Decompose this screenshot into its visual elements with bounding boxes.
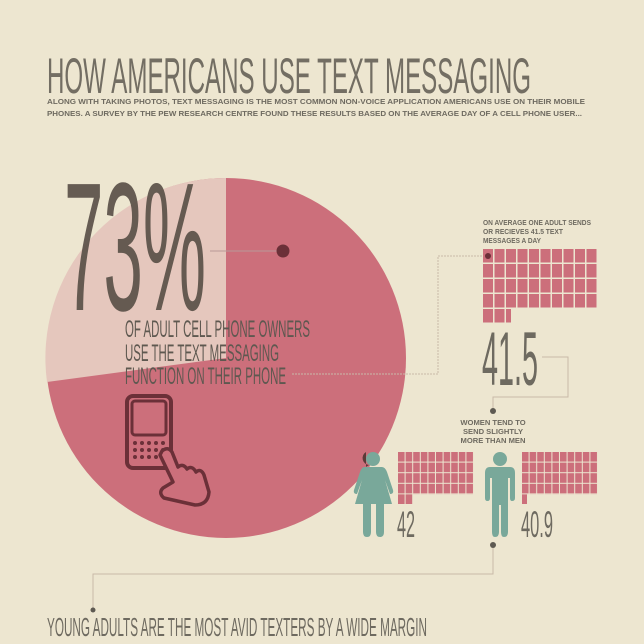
grid: men 40.9: [522, 452, 598, 504]
text: 41.5: [482, 317, 538, 402]
subtitle: PHONES. A SURVEY BY THE PEW RESEARCH CENTRE FOUND THESE RESULTS BASED ON THE AVERAGE DAY OF A CELL PHONE USER...: [47, 109, 582, 118]
subtitle: [47, 97, 585, 118]
pie chart: 73%: [45, 178, 406, 538]
dot markers: [90, 244, 496, 612]
text: average per day: MESSAGES A DAY: [483, 236, 541, 245]
icon: phone with hand: [127, 396, 209, 505]
text: 42: [397, 504, 415, 545]
text: 73%: [64, 144, 206, 349]
pie description: USE THE TEXT MESSAGING: [125, 340, 279, 367]
text: OF ADULT CELL PHONE OWNERS: [125, 316, 310, 343]
text: 40.9: [521, 504, 553, 545]
text: average per day: ON AVERAGE ONE ADULT SENDS: [483, 218, 591, 227]
pie description: FUNCTION ON THEIR PHONE: [125, 363, 286, 390]
grid: women 42: [398, 452, 474, 504]
connector lines: [93, 251, 568, 610]
icon: woman: [354, 452, 393, 537]
text: women send more: SEND SLIGHTLY: [463, 427, 523, 436]
grid: 41.5 messages: [483, 249, 598, 322]
pie description: [125, 316, 310, 390]
text: women send more: MORE THAN MEN: [461, 436, 525, 445]
icon: man: [485, 452, 515, 537]
text: women send more: [460, 418, 526, 445]
text: women send more: WOMEN TEND TO: [460, 418, 526, 427]
subtitle: ALONG WITH TAKING PHOTOS, TEXT MESSAGING IS THE MOST COMMON NON-VOICE APPLICATION AMERICANS USE ON THEIR MOBILE: [47, 97, 585, 106]
text: average per day: OR RECIEVES 41.5 TEXT: [483, 227, 563, 236]
text: average per day: [483, 218, 591, 245]
